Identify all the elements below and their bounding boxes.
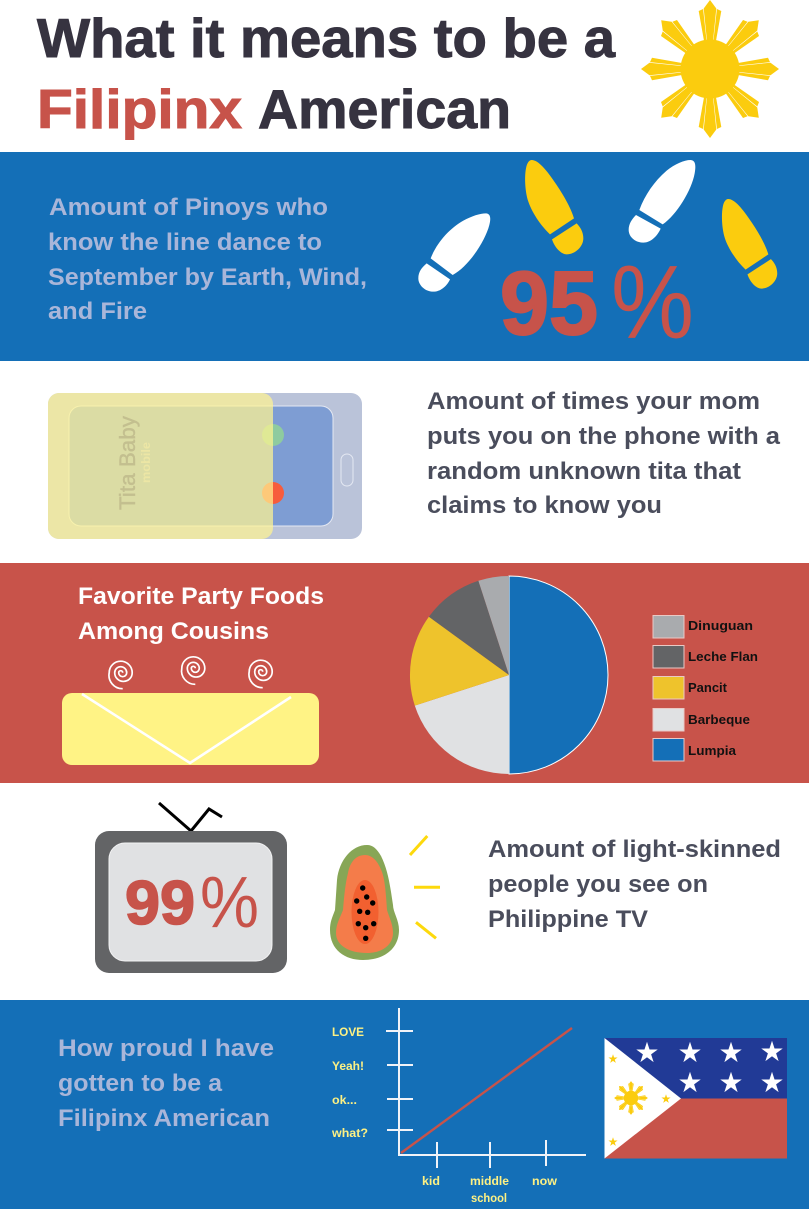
panel: phone calls	[48, 388, 781, 539]
text: line dance statistic: September by Earth, Wind,	[48, 264, 367, 291]
icon: papaya	[330, 836, 440, 960]
panel: pride	[0, 1000, 809, 1209]
line chart: pride over time: school	[471, 1191, 507, 1205]
icon: philippine sun	[641, 0, 779, 138]
panel: philippine tv	[95, 803, 781, 973]
line chart: pride over time: kid	[422, 1174, 440, 1188]
text: tv statistic: Philippine TV	[488, 906, 648, 933]
number: 95%: 95	[500, 254, 598, 354]
text: tv statistic	[488, 836, 781, 933]
icon: television	[95, 803, 287, 973]
icon: footprints	[418, 160, 777, 292]
text: phone statistic	[427, 388, 781, 519]
line chart: pride over time: what?	[331, 1126, 368, 1140]
icon: phone	[48, 393, 362, 539]
legend: Barbeque	[688, 712, 750, 727]
legend: Lumpia	[688, 743, 737, 758]
icon: steaming food tray	[62, 657, 319, 765]
text: tv statistic: Amount of light-skinned	[488, 836, 781, 863]
legend	[653, 616, 758, 761]
text: line dance statistic: Amount of Pinoys who	[49, 194, 328, 221]
text: line dance statistic: know the line dance to	[48, 229, 322, 256]
heading: party foods	[78, 583, 324, 645]
panel: line dance	[0, 152, 809, 361]
heading: party foods: Among Cousins	[78, 618, 269, 645]
icon: philippine flag	[604, 1038, 787, 1158]
text: pride statement	[58, 1035, 274, 1132]
legend: Dinuguan	[688, 618, 753, 633]
text: pride statement: Filipinx American	[58, 1105, 270, 1132]
text: line dance statistic: and Fire	[48, 298, 147, 325]
title	[37, 7, 615, 140]
icon: phone: Tita Baby	[115, 416, 140, 510]
line chart: pride over time: Yeah!	[332, 1059, 364, 1073]
text: phone statistic: claims to know you	[427, 492, 662, 519]
text: phone statistic: puts you on the phone with a	[427, 423, 781, 450]
line chart: pride over time	[331, 1008, 586, 1205]
line chart: pride over time: now	[532, 1174, 558, 1188]
number: 95%: %	[611, 245, 694, 361]
line chart: pride over time: middle	[470, 1174, 509, 1188]
number: 95%	[500, 245, 694, 361]
line chart: pride over time: LOVE	[332, 1025, 364, 1039]
legend: Leche Flan	[688, 649, 758, 664]
pie chart	[410, 576, 608, 774]
legend: Pancit	[688, 680, 728, 695]
title: American	[258, 78, 511, 140]
text: phone statistic: Amount of times your mom	[427, 388, 760, 415]
heading: party foods: Favorite Party Foods	[78, 583, 324, 610]
icon: phone: mobile	[139, 442, 153, 483]
title: Filipinx	[37, 78, 242, 140]
title: What it means to be a	[37, 7, 615, 69]
text: pride statement: How proud I have	[58, 1035, 274, 1062]
text: tv statistic: people you see on	[488, 871, 708, 898]
text: phone statistic: random unknown tita that	[427, 458, 741, 485]
panel: party foods	[0, 563, 809, 783]
icon: television: 99	[125, 869, 195, 938]
text: pride statement: gotten to be a	[58, 1070, 223, 1097]
line chart: pride over time: ok...	[332, 1093, 357, 1107]
text: line dance statistic	[48, 194, 367, 325]
icon: television: %	[200, 863, 259, 943]
